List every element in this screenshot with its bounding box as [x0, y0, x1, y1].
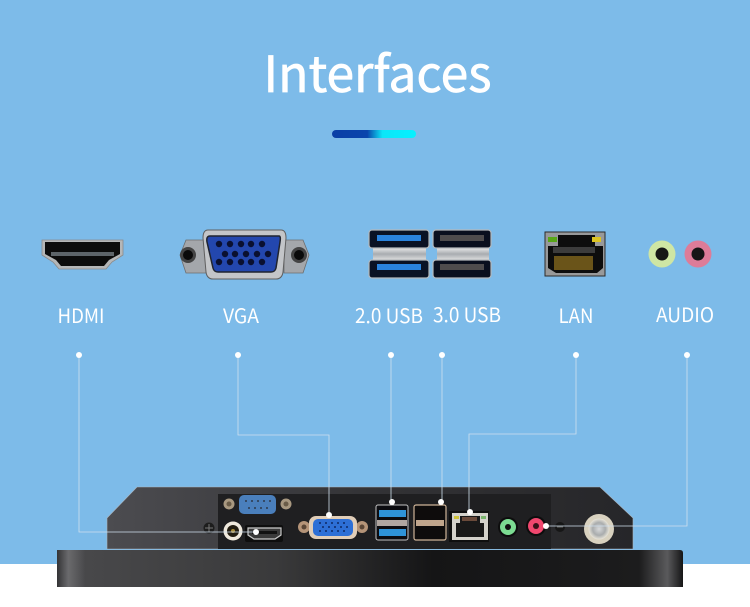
icon: VGA port	[180, 230, 309, 279]
icon: HDMI port	[42, 240, 123, 269]
leader line: 2.0 USB	[388, 352, 395, 505]
icon: USB 2.0 port	[369, 230, 429, 278]
leader line: VGA	[235, 352, 332, 518]
HDMI socket	[245, 525, 283, 542]
icon: USB 3.0 port	[433, 230, 491, 278]
LAN socket	[449, 511, 489, 542]
leader line: 3.0 USB	[438, 352, 445, 505]
screw left	[204, 522, 214, 534]
label: LAN: LAN	[558, 300, 594, 329]
label: HDMI: HDMI	[58, 300, 104, 329]
red audio socket	[526, 516, 546, 536]
label: 2.0 USB: 2.0 USB	[355, 300, 423, 329]
power button	[584, 514, 614, 544]
front bezel	[57, 550, 683, 587]
label: VGA: VGA	[223, 300, 260, 329]
title underline accent	[332, 130, 416, 138]
USB 3.0 socket	[414, 505, 446, 540]
icon: audio jacks	[648, 240, 712, 268]
title: Interfaces	[264, 35, 492, 107]
screw right	[555, 522, 565, 532]
leader line: AUDIO	[543, 352, 690, 529]
power jack	[224, 522, 242, 540]
green audio socket	[498, 517, 518, 537]
icon: LAN port	[545, 232, 605, 276]
device: rear panel of the computer	[57, 487, 683, 587]
serial port	[224, 495, 292, 514]
device body	[107, 487, 633, 549]
port recess	[218, 494, 551, 549]
USB 2.0 socket	[376, 505, 408, 540]
leader line: HDMI	[76, 352, 259, 535]
VGA socket	[298, 516, 368, 539]
leader line: LAN	[467, 352, 579, 515]
label: 3.0 USB: 3.0 USB	[433, 299, 501, 328]
label: AUDIO: AUDIO	[656, 299, 714, 328]
